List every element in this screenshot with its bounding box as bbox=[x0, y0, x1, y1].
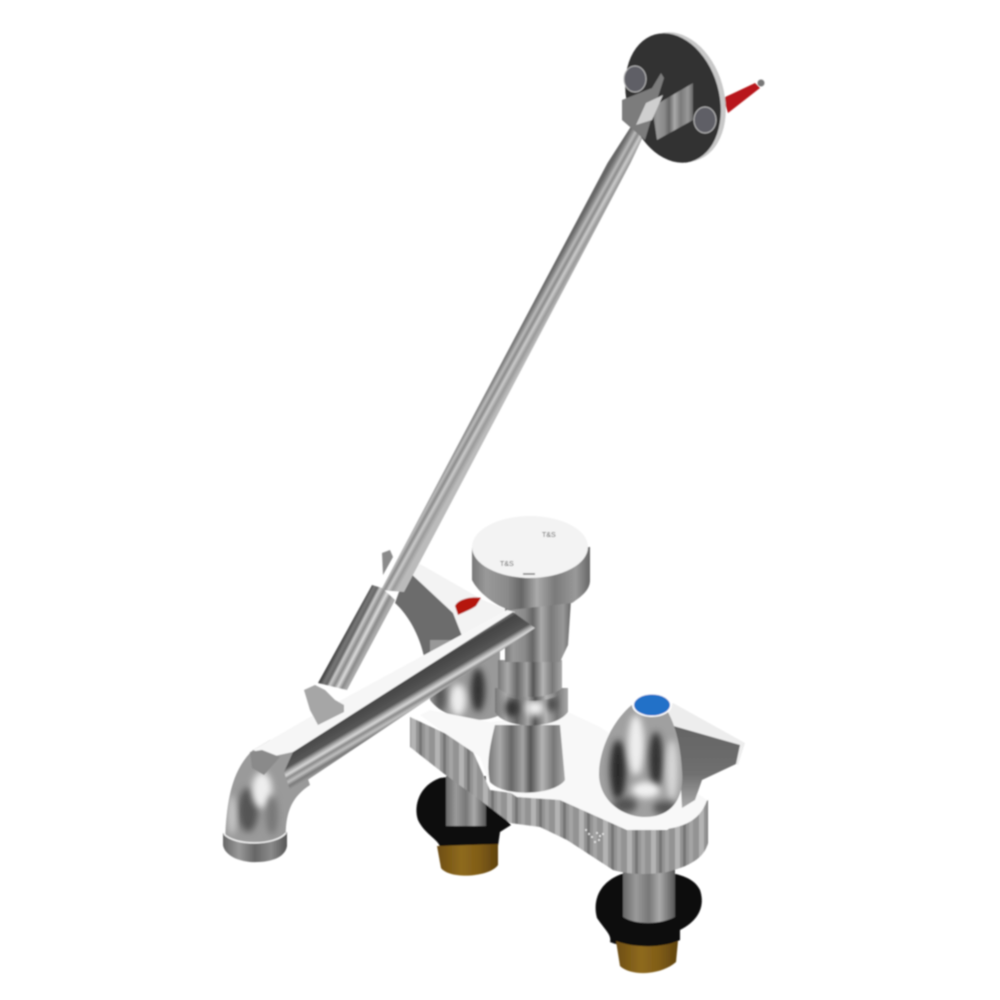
upper screw bbox=[624, 66, 646, 92]
deck logo dots bbox=[585, 829, 604, 843]
left handle behind spout bbox=[395, 564, 507, 725]
left shank assembly bbox=[416, 776, 511, 876]
cap side bbox=[472, 547, 590, 610]
push button cap bbox=[472, 516, 590, 610]
red pin bbox=[723, 83, 760, 113]
upper stem bbox=[505, 600, 571, 662]
right brass nut bbox=[616, 941, 678, 973]
rod end bbox=[636, 95, 663, 125]
cap rim mark bbox=[523, 573, 535, 575]
column base flare bbox=[488, 725, 565, 793]
spout bend bbox=[224, 749, 310, 843]
deck top face bbox=[420, 710, 707, 830]
flange knob bbox=[688, 42, 696, 48]
aerator highlight bbox=[224, 833, 286, 843]
right shank bbox=[623, 868, 675, 923]
left rubber gasket bbox=[416, 776, 511, 848]
wall flange assembly bbox=[611, 21, 764, 174]
nut swirl bbox=[505, 696, 557, 717]
pin tip bbox=[758, 80, 764, 86]
aerator ring bbox=[223, 832, 287, 862]
spout bbox=[220, 610, 535, 862]
lower screw bbox=[694, 107, 716, 133]
red hot indicator bbox=[455, 597, 481, 615]
illustration: deck-mounted faucet with rod bbox=[222, 32, 766, 974]
rod sleeve bbox=[318, 585, 395, 690]
thin rod bbox=[381, 95, 663, 592]
central column bbox=[472, 516, 590, 793]
flange rim bbox=[616, 21, 740, 173]
blue cold indicator ring bbox=[632, 693, 672, 717]
rod tab bbox=[382, 550, 393, 575]
right rubber gasket bbox=[596, 872, 702, 948]
handle wing white top bbox=[660, 703, 745, 765]
left handle dome bbox=[428, 640, 502, 725]
cap logo marks bbox=[500, 532, 556, 568]
rod clamp bbox=[304, 685, 344, 725]
deck plate bbox=[410, 710, 708, 874]
bracket block bbox=[622, 73, 664, 140]
handle wing grey face bbox=[663, 723, 740, 808]
left brass nut bbox=[437, 844, 498, 876]
collar nut bbox=[495, 688, 568, 726]
deck side wall bbox=[410, 717, 708, 874]
right shank assembly bbox=[596, 868, 702, 973]
flange hub bbox=[652, 83, 693, 140]
spout lower tube bbox=[284, 612, 535, 790]
left threaded shank bbox=[446, 776, 486, 826]
collar ring bbox=[498, 660, 562, 697]
right handle bbox=[595, 690, 745, 820]
handle dome bbox=[598, 704, 683, 818]
spout white top band bbox=[253, 610, 515, 757]
blue cap bbox=[634, 694, 670, 716]
left wing top face bbox=[407, 564, 507, 636]
long rod bbox=[304, 95, 663, 725]
left handle wing bbox=[395, 570, 490, 662]
cap top bbox=[472, 516, 588, 578]
spout clip bbox=[250, 750, 280, 775]
cap logo marks: T&S bbox=[500, 561, 514, 568]
flange disc bbox=[611, 22, 735, 174]
cap logo marks: T&S bbox=[542, 532, 556, 539]
